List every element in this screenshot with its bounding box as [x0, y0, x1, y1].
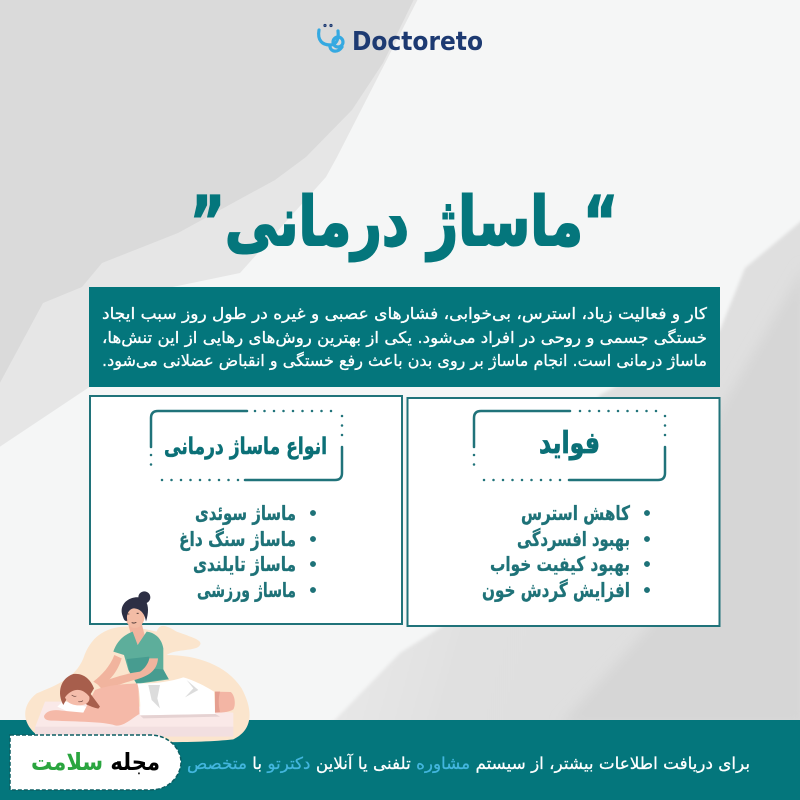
title: “ماساژ درمانی”: [190, 183, 618, 262]
list: benefits: افزایش گردش خون: [482, 578, 630, 602]
list: benefits: بهبود کیفیت خواب: [490, 552, 630, 576]
label: health magazine: [10, 735, 181, 790]
label: health magazine: مجله سلامت: [31, 748, 160, 776]
therapist neck: [128, 623, 145, 645]
therapist: [93, 591, 169, 689]
therapist hair: [122, 597, 148, 622]
list: benefits: [482, 501, 650, 602]
heading frame: [151, 411, 342, 480]
therapist face: [125, 604, 145, 628]
client hair: [60, 674, 100, 709]
heading: types of massage: انواع ماساژ درمانی: [164, 434, 327, 460]
heading frame: [474, 411, 665, 480]
panel: introduction: [89, 287, 720, 387]
client legs: [215, 692, 235, 713]
illustration: massage scene: [25, 591, 250, 742]
intro text: [102, 304, 707, 371]
massage table: [35, 702, 233, 727]
client face: [65, 690, 89, 705]
logo wordmark: Doctoreto: [352, 27, 483, 57]
list: massage types: ماساژ سنگ داغ: [179, 527, 296, 551]
backdrop blob: [25, 626, 250, 742]
intro text: خستگی جسمی و روحی در افراد می‌شود. یکی از بهترین روش‌های رهایی از این تنش‌ها،: [102, 328, 707, 348]
list: massage types: ماساژ ورزشی: [197, 578, 296, 602]
client: [44, 674, 235, 726]
therapist shirt: [113, 632, 169, 684]
heading: benefits: فواید: [539, 426, 600, 461]
list: massage types: ماساژ تایلندی: [193, 552, 296, 576]
list: massage types: ماساژ سوئدی: [195, 501, 296, 525]
panel: benefits: [408, 398, 720, 626]
client body: [44, 683, 139, 726]
pillow: [57, 701, 110, 714]
panel: types of massage: [90, 396, 402, 624]
footer text: برای دریافت اطلاعات بیشتر، از سیستم مشاوره تلفنی یا آنلاین دکترتو با متخصص: [187, 754, 750, 774]
list: benefits: کاهش استرس: [521, 501, 630, 525]
list: benefits: بهبود افسردگی: [517, 527, 630, 551]
footer band: [0, 720, 800, 800]
list: massage types: [179, 501, 316, 602]
intro text: کار و فعالیت زیاد، استرس، بی‌خوابی، فشارهای عصبی و غیره در طول روز سبب ایجاد: [102, 304, 707, 324]
towel: [137, 677, 215, 715]
icon: stethoscope: [319, 25, 343, 51]
therapist arms: [93, 655, 122, 686]
intro text: ماساژ درمانی است. انجام ماساژ بر روی بدن باعث رفع خستگی و انقباض عضلانی می‌شود.: [102, 351, 707, 371]
logo: Doctoreto: [319, 25, 483, 57]
